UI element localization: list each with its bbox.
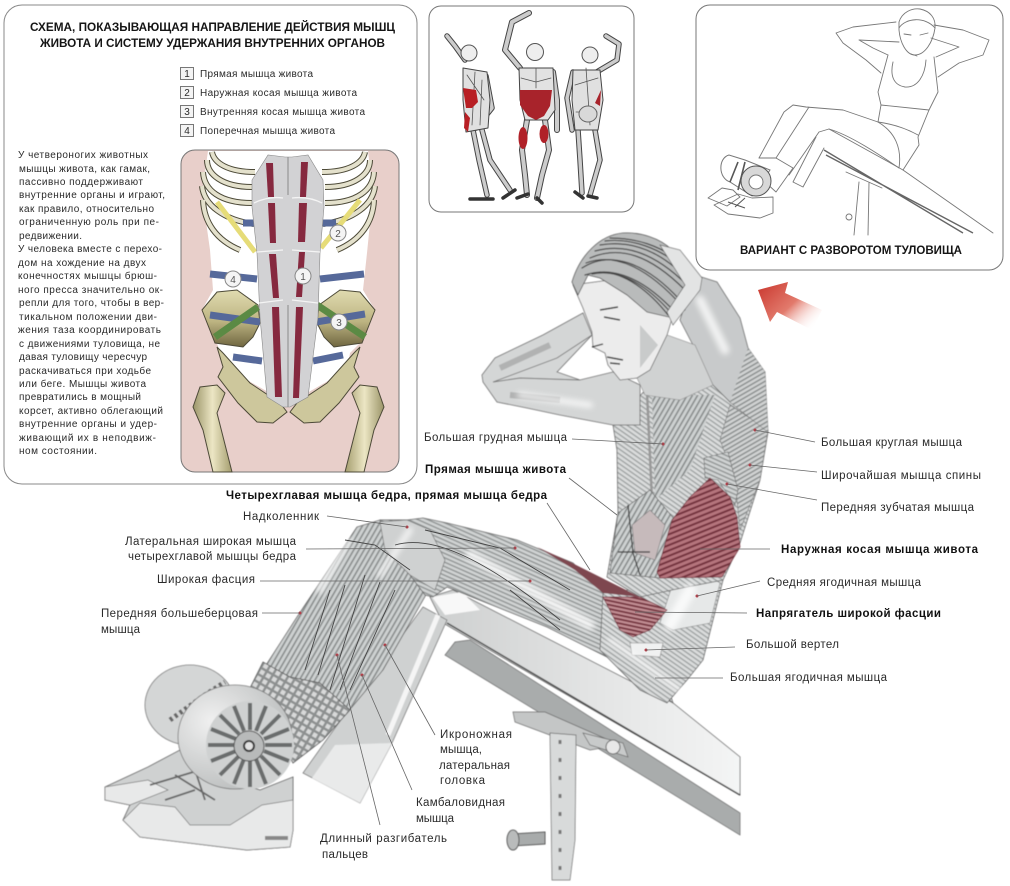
label: quadriceps (226, 490, 590, 570)
soft highlights (320, 300, 725, 690)
yellow external oblique (217, 202, 255, 252)
figure: back view (567, 36, 619, 198)
abdominal blocks (610, 490, 675, 578)
external oblique (red) (657, 478, 740, 578)
blue transverse bands (210, 223, 365, 361)
label: greater trochanter: Большой вертел (746, 639, 839, 651)
knee tendons (380, 520, 445, 590)
bench (829, 129, 993, 233)
number circles: 1 (300, 272, 306, 283)
shoes (105, 750, 293, 850)
label: gastrocnemius: головка (440, 775, 486, 787)
label: soleus: Камбаловидная (416, 797, 505, 809)
label: serratus anterior (727, 484, 975, 514)
grey rectus sheath (252, 155, 324, 407)
label: latissimus dorsi: Широчайшая мышца спины (821, 470, 981, 482)
text block: explanation: конечностях мышцы брюш- (18, 270, 157, 282)
label: patella: Надколенник (243, 511, 320, 523)
torso (878, 55, 938, 170)
label: greater trochanter (646, 639, 839, 651)
label: tibialis anterior: Передняя большеберцовая (101, 608, 258, 620)
label: fascia lata: Широкая фасция (157, 574, 255, 586)
label: extensor digitorum longus (320, 655, 447, 861)
text block: explanation: редвижении. (19, 231, 82, 242)
text block: explanation: превратились в мощный (19, 392, 141, 403)
torso (607, 370, 768, 597)
legend: numbered muscles: 3 (184, 107, 190, 118)
thigh (380, 518, 673, 703)
legend: numbered muscles: Наружная косая мышца живота (200, 88, 357, 99)
text block: explanation: внутренние органы и играют, (19, 190, 165, 201)
figure: main sit-up illustration (105, 233, 768, 880)
legs (759, 105, 878, 158)
label: quadriceps: Четырехглавая мышца бедра, прямая мышца бедра (226, 490, 548, 502)
label: gastrocnemius: Икроножная (440, 729, 512, 741)
legend: numbered muscles: Прямая мышца живота (200, 69, 313, 80)
red rectus strips (266, 162, 308, 398)
text block: explanation: как правило, относительно (19, 204, 154, 215)
text block: explanation: ном состоянии. (19, 446, 97, 457)
heading: scheme title: СХЕМА, ПОКАЗЫВАЮЩАЯ НАПРАВЛЕНИЕ ДЕЙСТВИЯ МЫШЦ (30, 19, 395, 34)
text block: explanation: У человека вместе с перехо- (18, 244, 162, 255)
number circles: 3 (336, 318, 342, 329)
hip and glutes (600, 580, 723, 703)
arrow: red pointer to variant (758, 282, 822, 330)
text block: explanation: ограниченную роль при пе- (19, 217, 159, 228)
label: serratus anterior: Передняя зубчатая мышца (821, 502, 975, 514)
label: soleus (362, 675, 505, 825)
label: gastrocnemius: латеральная (439, 760, 510, 772)
label: vastus lateralis (125, 536, 515, 563)
label: soleus: мышца (416, 813, 455, 825)
arms (836, 22, 896, 73)
text block: explanation: внутренние органы и удер- (19, 419, 157, 430)
number circles (225, 225, 347, 330)
raised upper arm (680, 275, 768, 432)
text block: explanation: дом на хождение на двух (18, 258, 146, 269)
trochanter (630, 643, 663, 657)
label: gastrocnemius: мышца, (440, 744, 482, 756)
label: gluteus medius (697, 577, 922, 596)
label: pectoralis major (424, 432, 663, 444)
label: teres major: Большая круглая мышца (821, 437, 963, 449)
label: latissimus dorsi (750, 465, 981, 482)
red marker dots (298, 428, 756, 676)
face (573, 280, 673, 380)
text block: explanation: раскачиваться при ходьбе (19, 365, 151, 377)
tensor fasciae latae (red) (603, 597, 667, 637)
label: external oblique: Наружная косая мышца живота (781, 544, 979, 556)
panel: three muscle figures (429, 6, 634, 212)
text block: explanation: корсет, активно облегающий (19, 405, 163, 417)
panel: variant with torso rotation (696, 5, 1003, 270)
label: gluteus maximus: Большая ягодичная мышца (730, 672, 888, 684)
muscle contour lines (305, 530, 570, 690)
label: rectus abdominis (425, 464, 617, 515)
text block: explanation: давая туловищу чересчур (19, 352, 147, 363)
text block: explanation: тикальном положении дви- (19, 312, 157, 323)
text block: explanation: репли для того, чтобы в вер- (19, 297, 164, 309)
diagram: torso skeleton with abdominal muscles (181, 150, 399, 472)
label: pectoralis major: Большая грудная мышца (424, 432, 568, 444)
text block: explanation: пассивно поддерживают (19, 177, 143, 188)
text block: explanation: живающий их в неподвиж- (19, 433, 156, 444)
skeleton right (290, 152, 384, 472)
panel: abdominal muscles scheme (4, 5, 417, 484)
hair (572, 233, 693, 318)
forearm and upper arm (482, 313, 640, 425)
legend: numbered muscles: 2 (184, 88, 190, 99)
abdomen area (202, 151, 375, 407)
text block: explanation (18, 150, 165, 457)
number circles: 4 (230, 275, 236, 286)
sock and pad (752, 137, 824, 192)
figure: side view (447, 36, 515, 199)
neck (637, 335, 713, 400)
label: gluteus medius: Средняя ягодичная мышца (767, 577, 922, 589)
heading: scheme title (30, 19, 395, 50)
head (899, 9, 935, 55)
label: rectus abdominis: Прямая мышца живота (425, 464, 567, 476)
hand behind head (660, 245, 702, 325)
serratus (704, 452, 738, 505)
sock (250, 662, 350, 763)
bench and support (303, 590, 740, 880)
shoes (708, 188, 773, 218)
label: teres major (755, 430, 963, 449)
labels: left side (101, 432, 663, 861)
label: extensor digitorum longus: пальцев (322, 849, 368, 861)
calf pad (303, 607, 447, 803)
text block: explanation: или беге. Мышцы живота (19, 378, 146, 390)
number circles: 2 (335, 229, 341, 240)
rectus femoris (red) (537, 547, 640, 597)
label: vastus lateralis: Латеральная широкая мышца (125, 536, 297, 548)
legend: numbered muscles: 4 (184, 126, 190, 137)
text block: explanation: ного пресса значительно ок- (18, 285, 163, 296)
caption: ВАРИАНТ С РАЗВОРОТОМ ТУЛОВИЩА (740, 243, 962, 257)
heading: scheme title: ЖИВОТА И СИСТЕМУ УДЕРЖАНИЯ ВНУТРЕННИХ ОРГАНОВ (39, 36, 385, 50)
text block: explanation: жения таза координировать (18, 325, 161, 336)
text block: explanation: с движениями туловища, не (19, 339, 160, 350)
figure: front view (505, 13, 557, 203)
legend: numbered muscles (180, 68, 365, 137)
labels: right side (635, 430, 981, 684)
label: gastrocnemius (385, 645, 512, 787)
label: tibialis anterior (101, 608, 300, 636)
text block: explanation: мышцы живота, как гамак, (19, 164, 150, 175)
green internal oblique (215, 307, 258, 337)
label: extensor digitorum longus: Длинный разгибатель (320, 833, 447, 845)
ankle roller (145, 665, 294, 789)
legend: numbered muscles: 1 (184, 69, 190, 80)
figure: line drawing of twisting sit-up (708, 9, 993, 235)
label: patella (243, 511, 407, 527)
label: vastus lateralis: четырехглавой мышцы бедра (128, 551, 297, 563)
lower leg (250, 520, 427, 713)
roller (721, 155, 770, 196)
label: tibialis anterior: мышца (101, 624, 141, 636)
text block: explanation: У четвероногих животных (18, 150, 148, 161)
skeleton left (193, 152, 287, 472)
legend: numbered muscles: Внутренняя косая мышца живота (200, 107, 365, 118)
label: tensor fasciae latae: Напрягатель широкой фасции (756, 608, 941, 620)
legend: numbered muscles: Поперечная мышца живота (200, 126, 335, 137)
